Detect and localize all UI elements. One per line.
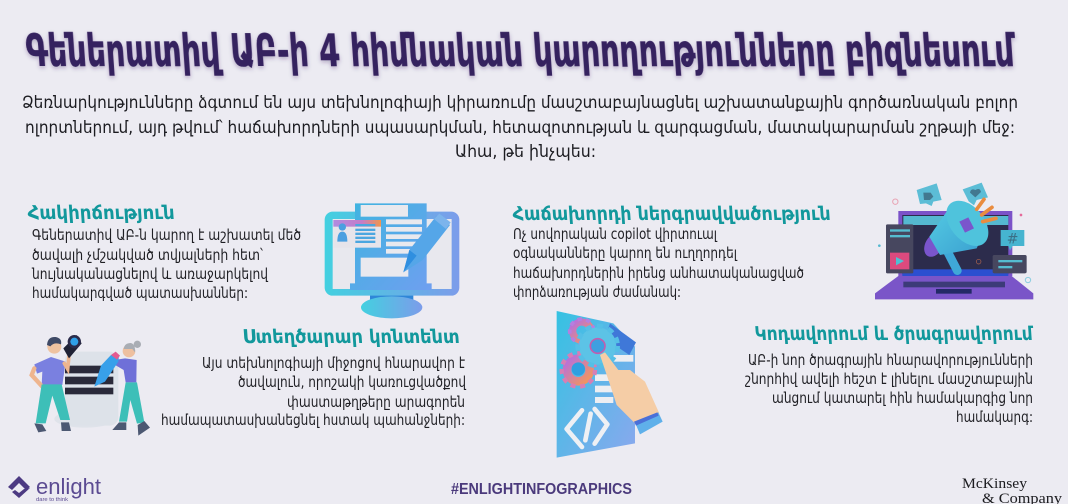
logo: McKinsey & Company	[962, 476, 1063, 504]
heading: customer engagement: Հաճախորդի ներգրավվածություն	[512, 203, 831, 225]
intro text	[22, 93, 1018, 162]
logo: enlight: enlight	[36, 474, 101, 499]
icon: monitor with document and pencil	[325, 203, 459, 318]
text: creative content: Այս տեխնոլոգիայի միջոցով հնարավոր է	[202, 354, 465, 372]
intro text: Ահա, թե ինչպես:	[455, 142, 596, 162]
text: customer engagement: Ոչ սովորական copilot վիրտուալ	[513, 225, 718, 243]
text: customer engagement: օգնականները կարող են ուղղորդել	[513, 244, 738, 262]
heading: coding and programming: Կոդավորում և ծրագրավորում	[754, 323, 1035, 345]
text: creative content: համապատասխանեցնել հստակ պահանջների:	[161, 411, 465, 429]
text: creative content	[161, 354, 466, 429]
icon: two people with document	[32, 335, 150, 436]
icon: laptop with megaphone	[875, 183, 1033, 299]
logo: enlight: dare to think	[36, 497, 69, 503]
panel: coding and programming	[745, 323, 1035, 426]
text: customer engagement: փորձառության ժամանակ:	[513, 283, 681, 301]
text: coding and programming	[745, 351, 1033, 426]
panel: conciseness	[27, 202, 301, 302]
icon: laptop with megaphone: #	[1007, 231, 1019, 247]
logo: McKinsey & Company: McKinsey	[962, 476, 1028, 492]
text: creative content: փաստաթղթերը արագորեն	[287, 393, 465, 411]
text: customer engagement	[513, 225, 804, 301]
text: conciseness: ծավալի չմշակված տվյալների հետ՝	[32, 246, 263, 264]
text: coding and programming: համակարգ:	[956, 408, 1033, 426]
panel: customer engagement	[512, 203, 831, 301]
text: customer engagement: հաճախորդներին իրենց անհատականացված	[513, 264, 804, 282]
text: conciseness	[31, 226, 301, 302]
logo: enlight	[8, 474, 101, 503]
heading: creative content: Ստեղծարար կոնտենտ	[242, 326, 460, 348]
text: conciseness: նույնականացնելով և առաջարկելով	[31, 265, 268, 283]
heading: conciseness: Հակիրճություն	[27, 202, 175, 224]
text: creative content: ծավալուն, որոշակի կառուցվածքով	[238, 373, 466, 391]
panel: creative content	[161, 326, 466, 429]
icon: code document with gears and hand	[557, 311, 663, 458]
text: conciseness: համակարգված պատասխաններ:	[32, 284, 248, 302]
text: conciseness: Գեներատիվ ԱԲ-ն կարող է աշխատել մեծ	[32, 226, 301, 244]
hashtag: #ENLIGHTINFOGRAPHICS	[451, 481, 632, 498]
